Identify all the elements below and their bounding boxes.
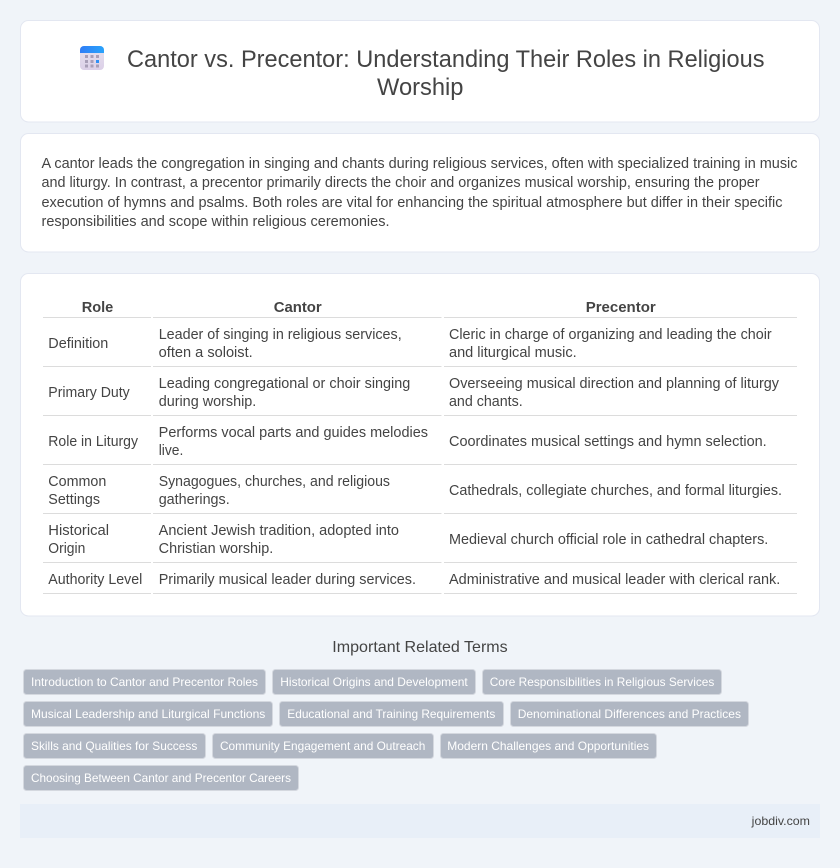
row: primary duty: Primary Duty — [48, 385, 130, 401]
row: authority level: Administrative and musical leader with clerical rank. — [449, 572, 780, 588]
description text: A cantor leads the congregation in singing and chants during religious services, often with specialized training in music — [42, 156, 798, 172]
row: primary duty: during worship. — [159, 394, 256, 410]
title — [127, 46, 764, 101]
tag: skills and qualities: Skills and Qualities for Success — [31, 739, 197, 753]
tag: educational requirements: Educational and Training Requirements — [287, 707, 495, 721]
tag: skills and qualities — [24, 734, 206, 758]
row: historical origin: Historical — [48, 523, 109, 539]
tag: historical origins — [272, 670, 476, 694]
row: common settings — [48, 474, 782, 508]
table header row: Precentor — [586, 299, 656, 316]
tag: choosing careers — [24, 766, 298, 790]
description text: responsibilities and scope within religious ceremonies. — [42, 214, 390, 230]
table header row: Cantor — [274, 299, 322, 316]
row: definition: Leader of singing in religious services, — [159, 327, 402, 343]
related term tags — [24, 670, 748, 790]
row: primary duty: and chants. — [449, 394, 523, 410]
description text — [42, 156, 798, 230]
tag: core responsibilities — [482, 670, 722, 694]
tag: musical leadership: Musical Leadership and Liturgical Functions — [31, 707, 265, 721]
title: Worship — [377, 74, 464, 101]
tag: denominational differences: Denominational Differences and Practices — [518, 707, 741, 721]
row: common settings: Settings — [48, 492, 100, 508]
row: historical origin: Ancient Jewish tradition, adopted into — [159, 523, 399, 539]
row: authority level: Authority Level — [48, 572, 142, 588]
row: role in liturgy: Performs vocal parts and guides melodies — [159, 425, 428, 441]
icon: calendar — [80, 46, 104, 70]
row: historical origin: Origin — [48, 541, 85, 557]
tag: choosing careers: Choosing Between Cantor and Precentor Careers — [31, 771, 291, 785]
table header row — [82, 299, 656, 316]
row: primary duty: Leading congregational or choir singing — [159, 376, 410, 392]
footer source text: jobdiv.com — [751, 814, 810, 828]
tag: introduction — [24, 670, 266, 694]
row: historical origin — [48, 523, 768, 557]
heading: important related terms: Important Related Terms — [332, 639, 508, 656]
tag: historical origins: Historical Origins and Development — [280, 675, 468, 689]
tag: community engagement: Community Engagement and Outreach — [220, 739, 425, 753]
description text: and liturgy. In contrast, a precentor primarily directs the choir and organizes musical worship, ensuring the proper — [42, 175, 760, 191]
row: authority level: Primarily musical leader during services. — [159, 572, 416, 588]
tag: community engagement — [212, 734, 434, 758]
tag: musical leadership — [24, 702, 272, 726]
tag: introduction: Introduction to Cantor and Precentor Roles — [31, 675, 258, 689]
row: historical origin: Christian worship. — [159, 541, 273, 557]
row: common settings: gatherings. — [159, 492, 230, 508]
tag: educational requirements — [280, 702, 504, 726]
footer — [20, 804, 820, 838]
row: role in liturgy — [48, 425, 767, 459]
panel: header — [20, 20, 820, 122]
row: definition: Definition — [48, 336, 108, 352]
row: common settings: Cathedrals, collegiate churches, and formal liturgies. — [449, 483, 782, 499]
row: common settings: Synagogues, churches, and religious — [159, 474, 390, 490]
row: definition — [48, 327, 772, 361]
table header row: Role — [82, 299, 113, 316]
tag: modern challenges: Modern Challenges and Opportunities — [447, 739, 649, 753]
panel: comparison table — [20, 274, 820, 616]
row: definition: Cleric in charge of organizing and leading the choir — [449, 327, 772, 343]
row: primary duty: Overseeing musical direction and planning of liturgy — [449, 376, 780, 392]
row: role in liturgy: Role in Liturgy — [48, 434, 139, 450]
row: authority level — [48, 572, 780, 588]
row: definition: often a soloist. — [159, 345, 253, 361]
panel: description — [20, 134, 820, 252]
row: role in liturgy: live. — [159, 443, 183, 459]
tag: denominational differences — [510, 702, 748, 726]
description text: execution of hymns and psalms. Both roles are vital for enhancing the spiritual atmosphere but differ in their specific — [42, 195, 782, 211]
row: role in liturgy: Coordinates musical settings and hymn selection. — [449, 434, 767, 450]
row: primary duty — [48, 376, 780, 410]
row: historical origin: Medieval church official role in cathedral chapters. — [449, 532, 768, 548]
title: Cantor vs. Precentor: Understanding Their Roles in Religious — [127, 46, 764, 73]
row: definition: and liturgical music. — [449, 345, 577, 361]
tag: core responsibilities: Core Responsibilities in Religious Services — [490, 675, 714, 689]
row: common settings: Common — [48, 474, 106, 490]
tag: modern challenges — [440, 734, 656, 758]
